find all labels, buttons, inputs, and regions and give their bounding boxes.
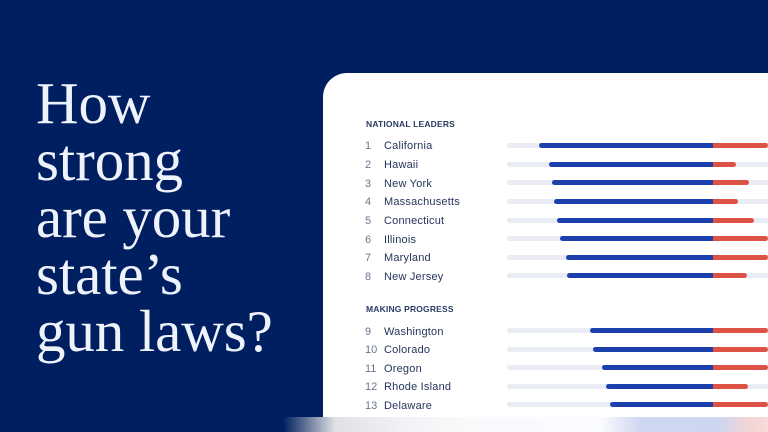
row: Colorado — [365, 344, 768, 356]
row: Massachusetts — [365, 196, 768, 208]
row: Connecticut: Connecticut — [384, 215, 444, 227]
title: How — [36, 70, 150, 136]
row: New Jersey: 8 — [365, 270, 371, 282]
heading: making progress: MAKING PROGRESS — [366, 304, 454, 314]
panel: state ranking card — [323, 73, 768, 432]
row: Maryland: Maryland — [384, 252, 431, 264]
row: California: California — [384, 140, 432, 152]
row: Massachusetts: Massachusetts — [384, 196, 460, 208]
row: Illinois — [365, 234, 768, 246]
row: Colorado: 10 — [365, 344, 377, 356]
row: New York — [365, 178, 768, 190]
row: Maryland — [365, 252, 768, 264]
row: Illinois: 6 — [365, 234, 371, 246]
row: Washington — [365, 326, 768, 338]
row: Illinois: Illinois — [384, 234, 416, 246]
row: Delaware: 13 — [365, 400, 377, 412]
row: New Jersey: New Jersey — [384, 270, 443, 282]
blurred bottom strip — [0, 417, 768, 432]
title: gun laws? — [36, 298, 273, 364]
row: Hawaii: Hawaii — [384, 159, 418, 171]
row: Oregon — [365, 362, 768, 374]
row: Connecticut — [365, 215, 768, 227]
heading: national leaders: NATIONAL LEADERS — [366, 119, 455, 129]
title: are your — [36, 184, 230, 250]
row: New Jersey — [365, 270, 768, 282]
row: Rhode Island — [365, 381, 768, 393]
row: Oregon: 11 — [365, 362, 376, 374]
row: Washington: Washington — [384, 326, 444, 338]
row: Rhode Island: Rhode Island — [384, 381, 451, 393]
row: Connecticut: 5 — [365, 215, 371, 227]
row: Massachusetts: 4 — [365, 196, 371, 208]
row: California: 1 — [365, 140, 371, 152]
title: state’s — [36, 241, 183, 307]
row: Delaware: Delaware — [384, 400, 432, 412]
row: New York: 3 — [365, 178, 371, 190]
row: Delaware — [365, 400, 768, 412]
title: strong — [36, 127, 183, 193]
row: Rhode Island: 12 — [365, 381, 377, 393]
row: New York: New York — [384, 178, 432, 190]
row: Colorado: Colorado — [384, 344, 430, 356]
title — [36, 70, 273, 364]
row: Hawaii — [365, 159, 768, 171]
row: California — [365, 140, 768, 152]
row: Hawaii: 2 — [365, 159, 371, 171]
row: Washington: 9 — [365, 326, 371, 338]
row: Oregon: Oregon — [384, 362, 422, 374]
row: Maryland: 7 — [365, 252, 371, 264]
